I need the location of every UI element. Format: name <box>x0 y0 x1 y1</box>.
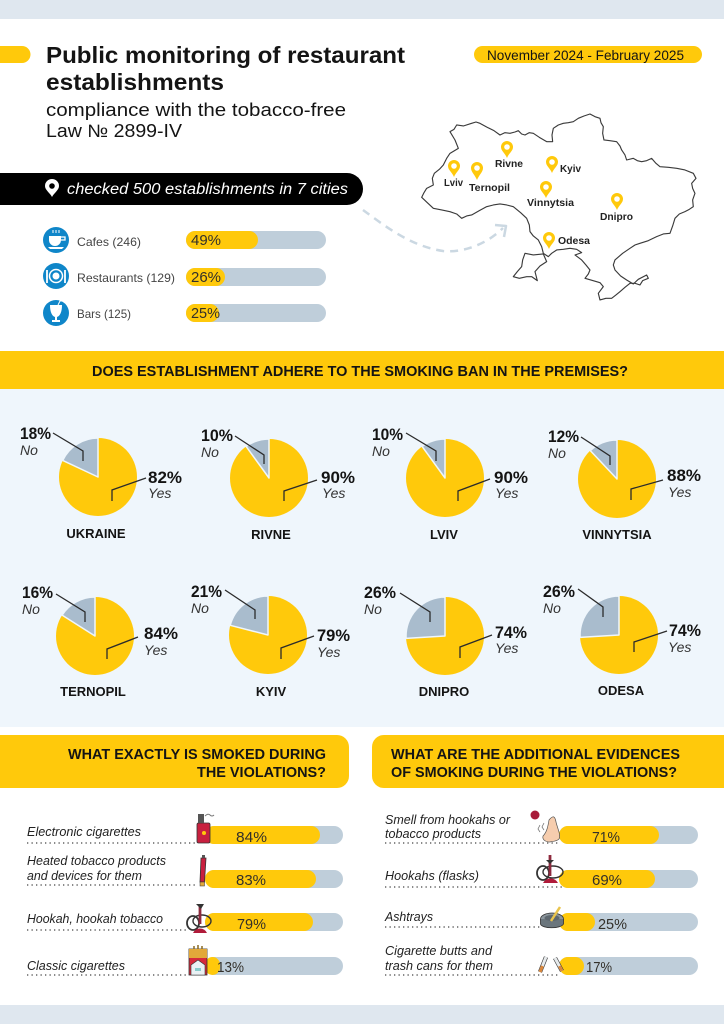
pie: Odesa: Yes <box>668 639 691 655</box>
bar: hookahs flasks: Hookahs (flasks) <box>385 869 479 883</box>
city pin: Odesa: Odesa <box>558 235 590 247</box>
city pin: Dnipro <box>600 193 633 223</box>
pie: Dnipro: Yes <box>495 640 518 656</box>
title: Public monitoring of restaurant <box>46 42 405 68</box>
pie: Kyiv <box>191 582 350 699</box>
bar: heated tobacco products: Heated tobacco products <box>27 854 166 868</box>
pie: Vinnytsia: 88% <box>667 466 701 485</box>
icon: cigarette butts <box>540 957 562 972</box>
pie: Ukraine: 18% <box>20 424 51 443</box>
city pin: Dnipro: Dnipro <box>600 211 633 223</box>
city pin: Vinnytsia: Vinnytsia <box>527 197 574 209</box>
bar: classic cigarettes: 13% <box>217 959 244 976</box>
pie: Vinnytsia: No <box>548 445 566 461</box>
icon: vape <box>197 814 214 843</box>
establishment type: cafes: 49% <box>191 232 221 249</box>
city pin: Rivne: Rivne <box>495 158 523 170</box>
subtitle: compliance with the tobacco-free <box>46 100 346 120</box>
city pin: Odesa <box>543 232 590 249</box>
pie: Kyiv: 21% <box>191 582 222 601</box>
pie: Odesa: 26% <box>543 582 575 601</box>
pie: Ukraine: UKRAINE <box>66 526 126 541</box>
pie: Rivne <box>201 426 355 542</box>
city pin: Rivne <box>495 141 523 170</box>
pie: Kyiv: No <box>191 600 209 616</box>
pie: Ternopil: 84% <box>144 624 178 643</box>
bar: cigarette butts: 17% <box>586 959 612 976</box>
pie: Ternopil: 16% <box>22 583 53 602</box>
pie: Odesa <box>543 582 701 698</box>
pie: Lviv: LVIV <box>430 527 458 542</box>
pie: Kyiv: 79% <box>317 626 350 645</box>
pie: Rivne: Yes <box>322 485 345 501</box>
pie: Lviv <box>372 425 528 542</box>
pie: Dnipro: 26% <box>364 583 396 602</box>
bar: hookah: 79% <box>237 916 266 933</box>
pie: Rivne: No <box>201 444 219 460</box>
icon: ashtray <box>540 907 564 928</box>
pie: Vinnytsia: Yes <box>668 484 691 500</box>
pie: Rivne: 90% <box>321 468 355 487</box>
pie: Dnipro: 74% <box>495 623 527 642</box>
city pin: Vinnytsia <box>527 181 574 209</box>
bar: ashtrays <box>384 907 698 933</box>
pie: Odesa: 74% <box>669 621 701 640</box>
bar: smell: tobacco products <box>385 827 481 841</box>
establishment type: restaurants <box>43 263 326 289</box>
city pin: Lviv <box>444 160 463 189</box>
bar: hookahs flasks: 69% <box>592 872 622 889</box>
bar: ashtrays: 25% <box>598 916 627 933</box>
pie: Lviv: No <box>372 443 390 459</box>
bar: hookah: Hookah, hookah tobacco <box>27 912 163 926</box>
bar: smell <box>385 810 698 846</box>
bar: classic cigarettes <box>27 945 343 976</box>
pie: Ukraine <box>20 424 182 541</box>
pie: Ternopil <box>22 583 178 699</box>
bar: heated tobacco products: 83% <box>236 872 266 889</box>
bar: smell: Smell from hookahs or <box>385 813 511 827</box>
date badge: November 2024 - February 2025 <box>487 48 684 63</box>
pie: Dnipro: No <box>364 601 382 617</box>
pie: Ukraine: 82% <box>148 468 182 487</box>
pie: Ukraine: No <box>20 442 38 458</box>
subtitle <box>46 100 346 141</box>
city pin: Ternopil: Ternopil <box>469 182 510 194</box>
bar: electronic cigarettes <box>27 814 343 846</box>
arrow to map <box>363 210 506 251</box>
bar: ashtrays: Ashtrays <box>384 910 433 924</box>
icon: cigarette pack <box>189 945 207 975</box>
section heading: what is smoked <box>0 735 349 788</box>
section heading: additional evidences: WHAT ARE THE ADDITIONAL EVIDENCES <box>391 746 680 763</box>
bar: electronic cigarettes: Electronic cigarettes <box>27 825 141 839</box>
bar: cigarette butts <box>385 944 698 976</box>
pie: Ternopil: Yes <box>144 642 167 658</box>
pie: Lviv: 10% <box>372 425 403 444</box>
establishment type: restaurants: Restaurants (129) <box>77 271 175 285</box>
bar: classic cigarettes: Classic cigarettes <box>27 959 125 973</box>
establishment type: restaurants: 26% <box>191 269 221 286</box>
bar: cigarette butts: Cigarette butts and <box>385 944 493 958</box>
pie: Ukraine: Yes <box>148 485 171 501</box>
pie: Kyiv: Yes <box>317 644 340 660</box>
map of Ukraine <box>422 114 696 300</box>
section heading: smoking ban <box>0 351 724 389</box>
city pin: Kyiv: Kyiv <box>560 163 581 175</box>
section heading: additional evidences: OF SMOKING DURING THE VIOLATIONS? <box>391 764 677 781</box>
pie: Lviv: 90% <box>494 468 528 487</box>
bar: hookah <box>27 904 343 933</box>
bar: electronic cigarettes: 84% <box>236 829 267 846</box>
establishment type: cafes: Cafes (246) <box>77 235 141 249</box>
pie: Ternopil: TERNOPIL <box>60 684 126 699</box>
establishment type: bars <box>43 300 326 326</box>
icon: heated tobacco device <box>200 855 206 886</box>
pie: Dnipro <box>364 583 527 699</box>
pie: Odesa: ODESA <box>598 683 645 698</box>
subtitle: Law № 2899-IV <box>46 121 182 141</box>
establishment type: bars: 25% <box>191 305 220 322</box>
bar: heated tobacco products: and devices for them <box>27 869 142 883</box>
bar: hookahs flasks <box>385 855 698 889</box>
establishment type: bars: Bars (125) <box>77 307 131 321</box>
checked establishments banner: checked 500 establishments in 7 cities <box>67 181 348 198</box>
title <box>0 42 405 95</box>
pie: Vinnytsia <box>548 427 701 542</box>
city pin: Kyiv <box>546 156 581 175</box>
icon: hookah flask <box>537 855 563 883</box>
section heading: additional evidences <box>372 735 724 788</box>
bar: heated tobacco products <box>27 854 343 889</box>
establishment type: cafes <box>43 227 326 253</box>
pie: Ternopil: No <box>22 601 40 617</box>
city pin: Lviv: Lviv <box>444 177 463 189</box>
panel: pie charts <box>0 389 724 727</box>
pie: Rivne: RIVNE <box>251 527 291 542</box>
pie: Dnipro: DNIPRO <box>419 684 469 699</box>
section heading: smoking ban: DOES ESTABLISHMENT ADHERE TO THE SMOKING BAN IN THE PREMISES? <box>92 364 628 380</box>
section heading: what is smoked: THE VIOLATIONS? <box>197 764 326 781</box>
pie: Lviv: Yes <box>495 485 518 501</box>
pie: Vinnytsia: 12% <box>548 427 579 446</box>
icon: hookah <box>187 904 211 933</box>
pie: Rivne: 10% <box>201 426 233 445</box>
icon: nose <box>530 810 560 842</box>
bar: cigarette butts: trash cans for them <box>385 959 493 973</box>
checked establishments banner <box>0 173 363 205</box>
bar: smell: 71% <box>592 829 620 846</box>
title: establishments <box>46 69 224 95</box>
pie: Kyiv: KYIV <box>256 684 286 699</box>
section heading: what is smoked: WHAT EXACTLY IS SMOKED DURING <box>68 746 326 763</box>
pie: Vinnytsia: VINNYTSIA <box>582 527 652 542</box>
pie: Odesa: No <box>543 600 561 616</box>
city pin: Ternopil <box>469 162 510 194</box>
